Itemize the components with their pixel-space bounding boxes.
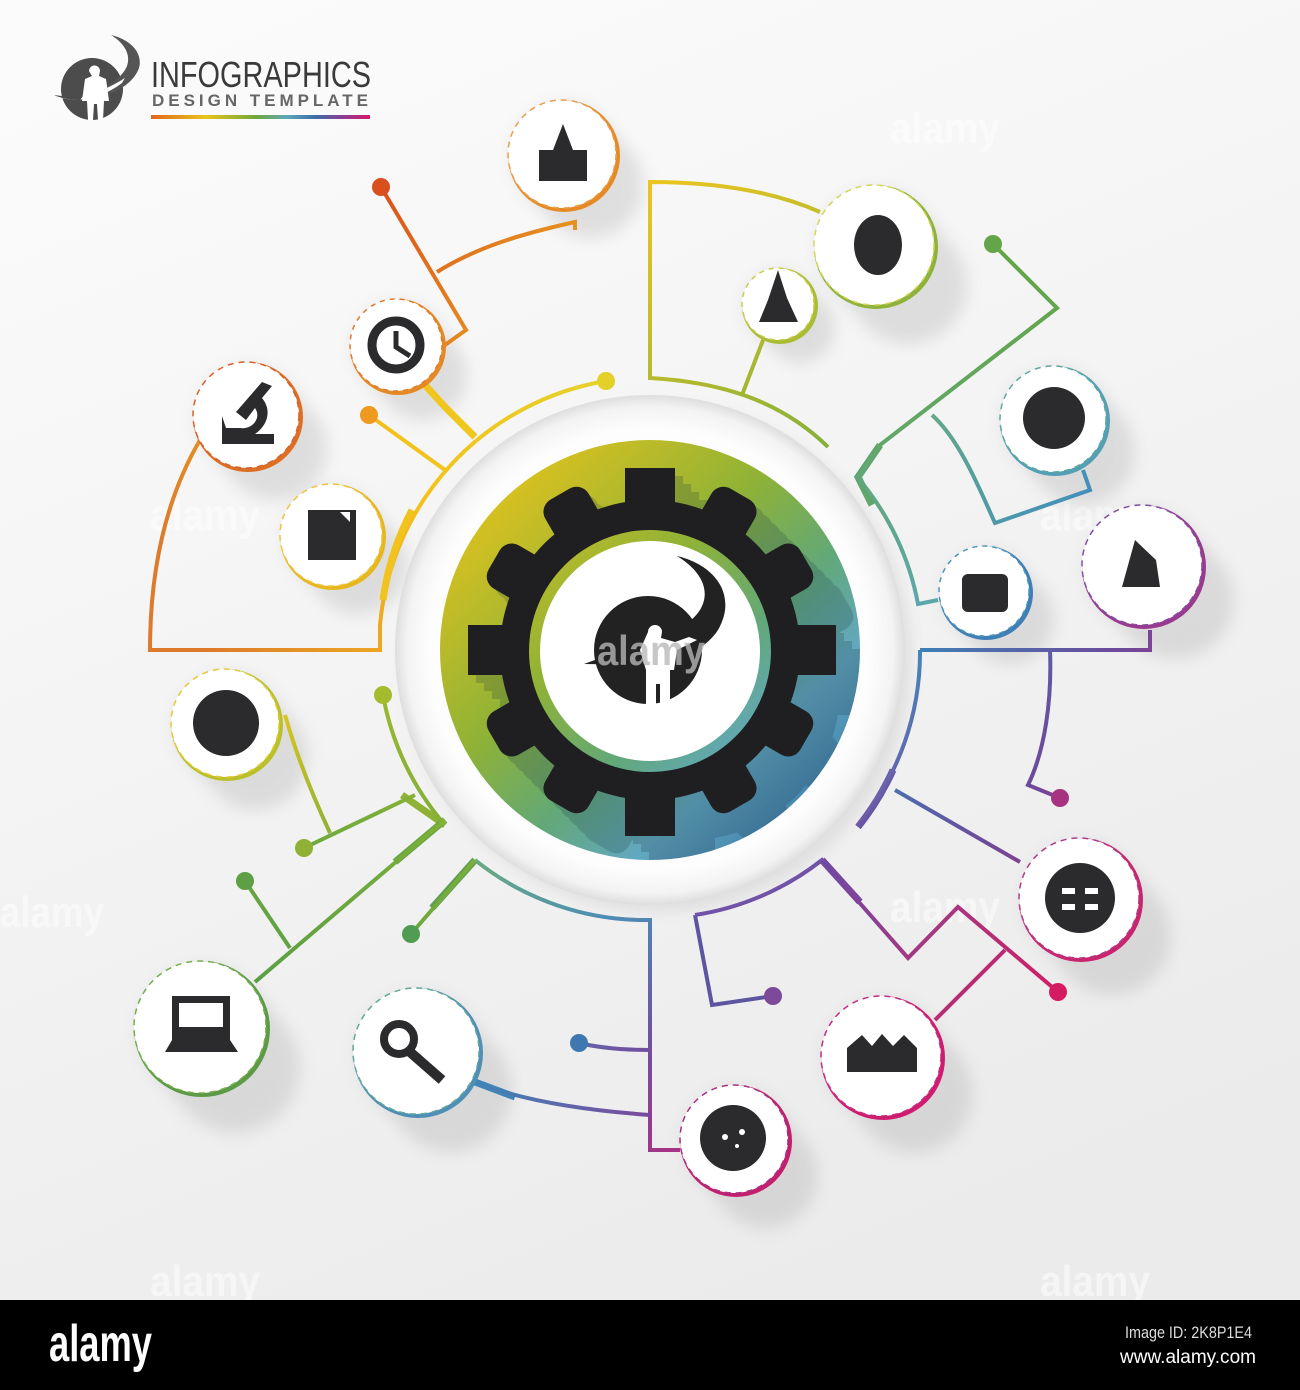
footer url: www.alamy.com bbox=[1119, 1347, 1256, 1368]
line: thick ring stubs bbox=[383, 445, 893, 1097]
line: bottom trunk bbox=[475, 860, 680, 1150]
faint watermarks: alamy bbox=[150, 491, 260, 540]
line: top-right frame bbox=[650, 182, 828, 447]
footer bar bbox=[0, 1300, 1300, 1390]
node: house (top) bbox=[508, 100, 620, 212]
line: yellow branch bbox=[285, 715, 330, 833]
footer image id: Image ID: 2K8P1E4 bbox=[1125, 1323, 1252, 1342]
gear white center bbox=[540, 541, 760, 761]
logo subtitle: DESIGN TEMPLATE bbox=[152, 91, 368, 110]
faint watermarks bbox=[0, 104, 1150, 1306]
node shadows bbox=[204, 157, 1175, 1175]
line: orange dot branch bbox=[369, 415, 445, 470]
central hub bbox=[395, 395, 912, 912]
faint watermarks: alamy bbox=[0, 888, 104, 937]
line: teal branch bbox=[932, 415, 1090, 523]
line: magenta zigzag bbox=[695, 860, 1058, 1020]
logo title: INFOGRAPHICS bbox=[151, 54, 371, 95]
gear inner ring bbox=[529, 530, 771, 772]
node: cluster (bottom right) bbox=[821, 996, 945, 1120]
line: green lower-left branches bbox=[245, 695, 475, 982]
node: button (lower right) bbox=[1019, 838, 1143, 962]
node: dotted circle (bottom) bbox=[680, 1085, 792, 1197]
node: document (left) bbox=[280, 484, 386, 590]
node: block (right inner) bbox=[939, 546, 1033, 640]
line: lower-right branch bbox=[895, 790, 1020, 862]
center watermark: alamy bbox=[597, 627, 706, 674]
faint watermarks: alamy bbox=[890, 883, 1000, 932]
faint watermarks: alamy bbox=[890, 104, 1000, 153]
line: right horizontal bbox=[920, 630, 1150, 798]
hub disc bbox=[440, 440, 860, 860]
rainbow bar bbox=[151, 115, 370, 119]
center emblem bbox=[584, 556, 725, 704]
line: magnifier branch bbox=[475, 1082, 650, 1115]
hub ring bbox=[395, 395, 905, 905]
logo emblem bbox=[54, 35, 140, 120]
connector lines bbox=[150, 182, 1150, 1150]
footer brand: alamy bbox=[49, 1315, 152, 1373]
hub ring shadow bbox=[404, 404, 912, 912]
node: clock (upper left inner) bbox=[350, 299, 446, 395]
line: right arc bbox=[858, 650, 920, 825]
node: round blob (left) bbox=[171, 669, 283, 781]
node: cone (small top right) bbox=[742, 268, 818, 344]
node: wedge (right) bbox=[1082, 505, 1206, 629]
line: purple hook bbox=[695, 915, 773, 1005]
line: clock branch bbox=[425, 385, 475, 437]
logo: header brand bbox=[54, 35, 371, 120]
line: upper-left ring and frame bbox=[150, 381, 606, 650]
node: bean (top right) bbox=[814, 185, 938, 309]
faint watermarks: alamy bbox=[1040, 1257, 1150, 1306]
node: ball (right upper) bbox=[1000, 366, 1110, 476]
node: laptop (lower left) bbox=[134, 961, 270, 1097]
node: microscope (upper left) bbox=[193, 362, 303, 472]
line: green zigzag bbox=[858, 244, 1057, 604]
line: top-left branch bbox=[381, 187, 575, 345]
gear bbox=[468, 468, 836, 836]
connector dots bbox=[236, 178, 1069, 1052]
faint watermarks: alamy bbox=[1040, 491, 1150, 540]
faint watermarks: alamy bbox=[150, 1257, 260, 1306]
node: magnifier (bottom left) bbox=[353, 988, 483, 1118]
gear long shadow bbox=[476, 476, 876, 876]
